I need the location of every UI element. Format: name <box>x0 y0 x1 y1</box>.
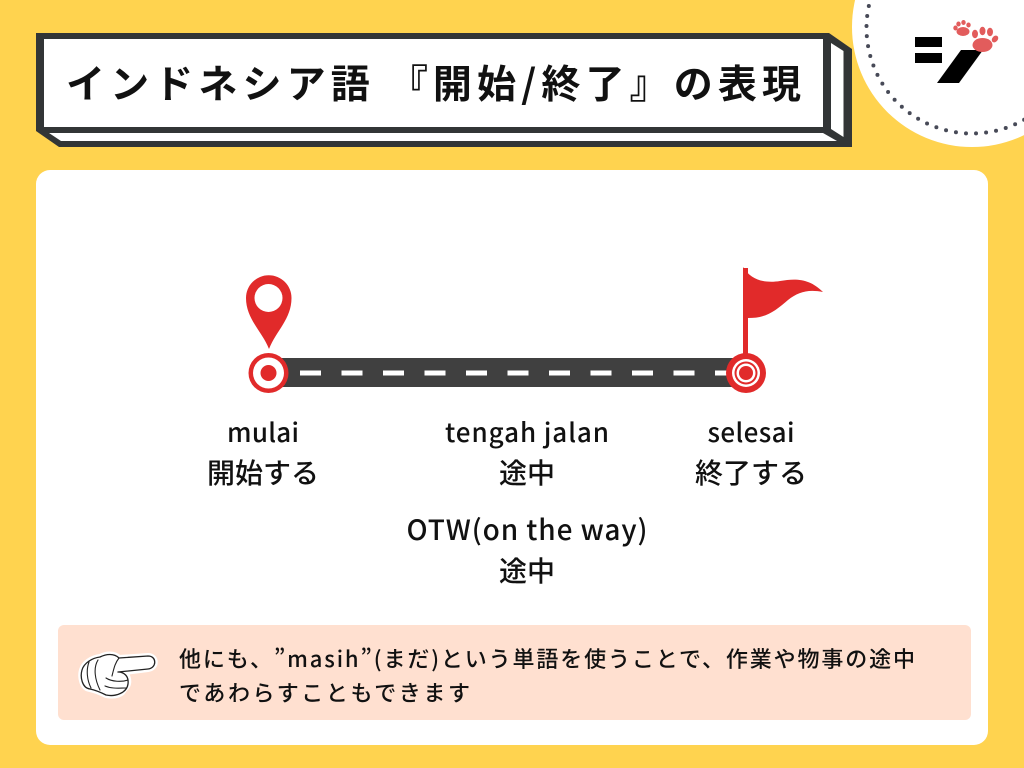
label: midway: tengah jalan <box>445 413 609 450</box>
label: start <box>207 413 319 492</box>
label: start: mulai <box>227 413 299 450</box>
label: finish <box>695 413 807 492</box>
callout text <box>179 642 915 708</box>
title text: インドネシア語 『開始/終了』の表現 <box>66 54 801 110</box>
panel: main <box>36 170 988 745</box>
label: start: 開始する <box>207 452 319 492</box>
label: finish: selesai <box>708 413 794 450</box>
label: midway <box>445 413 609 492</box>
label: OTW: OTW(on the way) <box>406 509 648 549</box>
icon: start marker <box>246 275 292 393</box>
icon: goal flag <box>726 267 823 393</box>
callout text: 他にも、”masih”(まだ)という単語を使うことで、作業や物事の途中 <box>179 642 915 674</box>
callout <box>58 625 971 720</box>
label: OTW <box>406 509 648 590</box>
label: finish: 終了する <box>695 452 807 492</box>
label: midway: 途中 <box>499 452 555 492</box>
logo badge <box>852 0 1024 147</box>
title banner <box>36 33 852 147</box>
callout text: であわらすこともできます <box>179 676 470 708</box>
road timeline <box>246 267 823 393</box>
icon: logo mark <box>915 20 1000 83</box>
label: OTW: 途中 <box>499 550 555 590</box>
road dashes <box>300 370 735 376</box>
road <box>268 358 745 387</box>
icon: pointing hand <box>81 654 155 696</box>
